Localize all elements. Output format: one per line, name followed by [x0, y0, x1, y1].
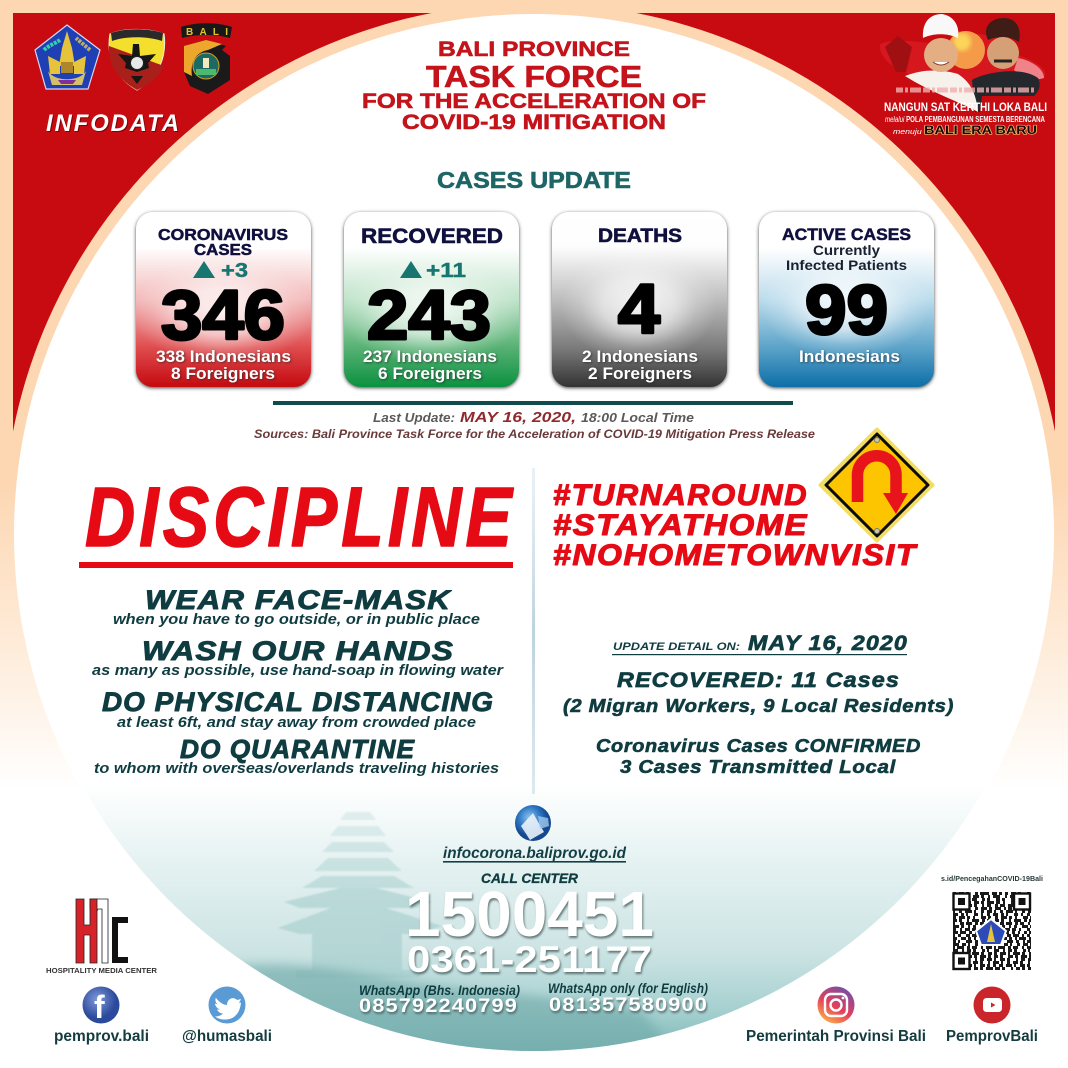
divider under cards: [273, 401, 793, 405]
protocol list: as many as possible, use hand-soap in flowing water: [92, 662, 504, 679]
update detail: 3 Cases Transmitted Local: [620, 757, 896, 777]
update detail: [563, 632, 954, 777]
foreshore foliage: [243, 960, 664, 1051]
governor photo banner: [880, 14, 1047, 137]
text: BALI: BALI: [186, 27, 228, 38]
protocol list: DO PHYSICAL DISTANCING: [102, 687, 494, 717]
temple silhouette: [278, 812, 442, 978]
hashtags: #NOHOMETOWNVISIT: [553, 539, 918, 572]
last update text: 18:00 Local Time: [581, 410, 694, 425]
icon: u-turn road sign: [820, 429, 933, 541]
card: active cases: ACTIVE CASES: [782, 226, 911, 244]
icon: globe: [515, 805, 551, 841]
youtube: PemprovBali: [946, 1028, 1038, 1045]
logo caption: HOSPITALITY MEDIA CENTER: [46, 966, 158, 975]
last update text: [373, 409, 694, 426]
bali map silhouette and sunset: [880, 31, 1045, 87]
banner era text: menuju BALI ERA BARU: [893, 125, 1037, 137]
protocol list: when you have to go outside, or in public place: [113, 611, 480, 628]
emblem: Bali province: [35, 25, 100, 89]
infodata label: INFODATA: [46, 110, 181, 137]
emblem: Bali police: [181, 23, 232, 94]
youtube: [946, 986, 1038, 1045]
card: active cases: [759, 212, 934, 387]
vertical divider: [532, 468, 535, 794]
protocol list: [92, 585, 504, 777]
whatsapp indonesian: 085792240799: [359, 996, 518, 1017]
whatsapp indonesian: [359, 982, 520, 1017]
website: infocorona.baliprov.go.id: [443, 845, 627, 862]
update detail: MAY 16, 2020: [748, 632, 908, 655]
title block: TASK FORCE: [426, 59, 642, 94]
logo: hospitality media center: [46, 899, 158, 975]
card: recovered: RECOVERED: [361, 225, 503, 248]
card: active cases: Indonesians: [799, 347, 900, 366]
sources text: Sources: Bali Province Task Force for the Acceleration of COVID-19 Mitigation Press Release: [254, 429, 816, 441]
twitter: [182, 986, 272, 1045]
card: coronavirus cases: CORONAVIRUS: [158, 227, 288, 244]
card: coronavirus cases: 8 Foreigners: [171, 364, 275, 383]
qr url: s.id/PencegahanCOVID-19Bali: [941, 874, 1043, 883]
hotline number: 1500451: [405, 878, 654, 950]
card: coronavirus cases: 346: [161, 276, 285, 354]
card: coronavirus cases: 338 Indonesians: [156, 347, 291, 366]
update detail: Coronavirus Cases CONFIRMED: [596, 736, 921, 756]
call center label: CALL CENTER: [481, 870, 579, 886]
portrait left: [905, 14, 978, 112]
whatsapp english: 081357580900: [549, 995, 708, 1016]
card: deaths: [552, 212, 727, 387]
update detail: RECOVERED: 11 Cases: [617, 669, 900, 692]
protocol list: WASH OUR HANDS: [142, 636, 454, 666]
title block: COVID-19 MITIGATION: [402, 111, 666, 134]
last update text: Last Update:: [373, 410, 455, 425]
protocol list: to whom with overseas/overlands traveling histories: [94, 760, 499, 777]
card: coronavirus cases: CASES: [194, 242, 252, 259]
discipline heading: DISCIPLINE: [85, 470, 516, 564]
cases update heading: CASES UPDATE: [437, 167, 631, 193]
facebook: [54, 986, 149, 1045]
facebook: pemprov.bali: [54, 1028, 149, 1045]
emblem: Udayana: [109, 29, 165, 90]
teal lower circle with temple: [97, 809, 970, 1051]
hashtags: [553, 479, 918, 572]
title block: [362, 38, 706, 134]
protocol list: DO QUARANTINE: [180, 734, 415, 764]
whatsapp indonesian: WhatsApp (Bhs. Indonesia): [359, 982, 520, 998]
last update text: MAY 16, 2020,: [460, 409, 576, 426]
instagram: [746, 986, 926, 1045]
title block: FOR THE ACCELERATION OF: [362, 90, 706, 113]
card: recovered: +11: [426, 260, 466, 282]
whatsapp english: [548, 980, 708, 1016]
card: recovered: 243: [367, 276, 491, 354]
hashtags: #TURNAROUND: [553, 479, 808, 512]
instagram: Pemerintah Provinsi Bali: [746, 1028, 926, 1045]
card: recovered: [339, 212, 523, 387]
card: deaths: 2 Indonesians: [582, 347, 698, 366]
card: deaths: DEATHS: [598, 226, 682, 247]
title block: BALI PROVINCE: [438, 38, 630, 61]
discipline underline: [79, 562, 513, 568]
card: deaths: 2 Foreigners: [588, 364, 692, 383]
update detail: (2 Migran Workers, 9 Local Residents): [563, 695, 954, 716]
card: coronavirus cases: +3: [221, 260, 248, 282]
card: recovered: 6 Foreigners: [378, 364, 482, 383]
landline number: 0361-251177: [407, 939, 652, 980]
twitter: @humasbali: [182, 1028, 272, 1045]
card: active cases: Currently: [813, 242, 880, 258]
whatsapp english: WhatsApp only (for English): [548, 980, 708, 996]
banner slogan: NANGUN SAT KERTHI LOKA BALI: [884, 102, 1047, 114]
protocol list: WEAR FACE-MASK: [145, 585, 453, 615]
protocol list: at least 6ft, and stay away from crowded place: [117, 714, 476, 731]
hashtags: #STAYATHOME: [553, 509, 808, 542]
card: coronavirus cases: [131, 212, 315, 387]
card: active cases: 99: [805, 271, 888, 349]
card: deaths: 4: [618, 270, 660, 348]
qr code: [953, 894, 1031, 969]
facebook: f: [94, 989, 105, 1025]
update detail: UPDATE DETAIL ON:: [613, 641, 740, 653]
portrait right: [972, 18, 1040, 112]
card: active cases: Infected Patients: [786, 257, 907, 273]
card: recovered: 237 Indonesians: [363, 347, 497, 366]
